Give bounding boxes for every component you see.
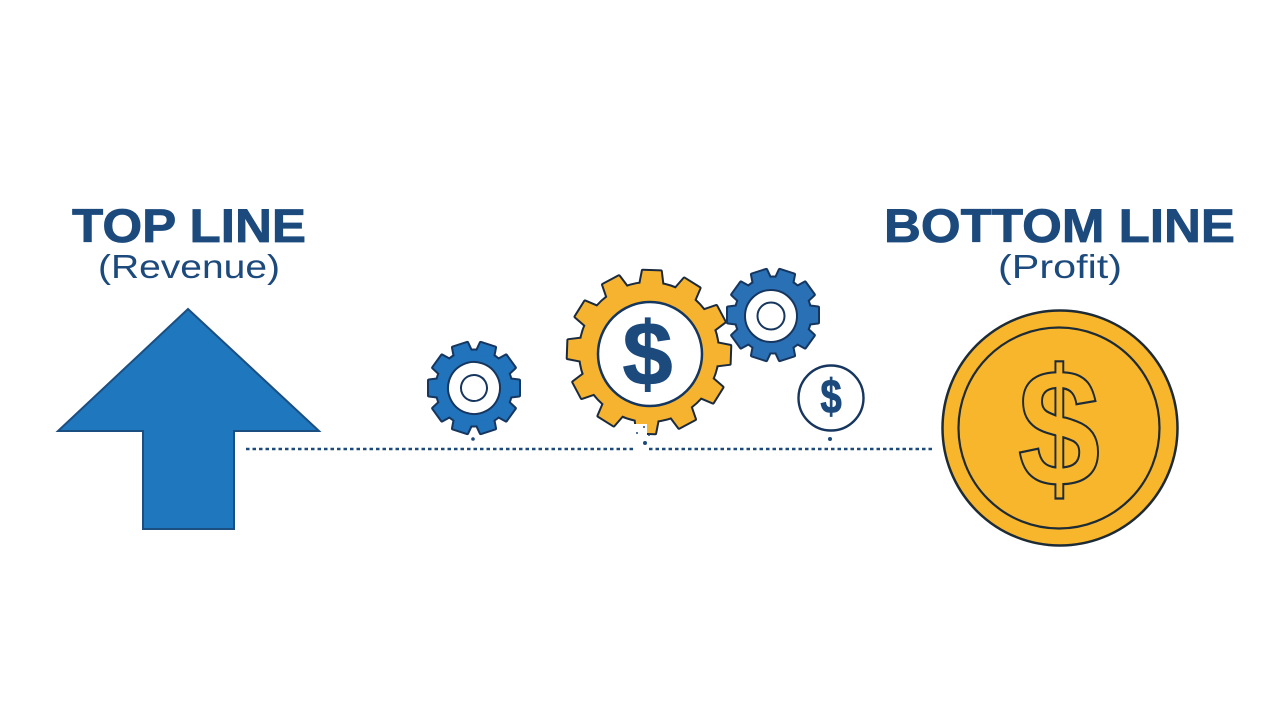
icon: left blue gear xyxy=(417,331,531,445)
icon: large gold coin with dollar: $ xyxy=(1018,334,1100,522)
heading: bottom line xyxy=(884,199,1235,285)
icon: right blue gear xyxy=(716,258,830,372)
heading: top line xyxy=(72,199,306,285)
icon: large gold gear with dollar: $ xyxy=(622,305,673,405)
icon: right gear hub xyxy=(745,290,797,342)
icon: small dollar coin: $ xyxy=(820,371,842,424)
icon: large gold coin with dollar xyxy=(942,310,1178,546)
heading: bottom line: BOTTOM LINE xyxy=(884,199,1235,252)
heading: top line: (Revenue) xyxy=(98,248,280,285)
icon: large gold gear with dollar xyxy=(565,268,733,436)
heading: top line: TOP LINE xyxy=(72,199,306,252)
heading: bottom line: (Profit) xyxy=(998,248,1122,285)
icon: small dollar coin xyxy=(798,366,864,430)
icon: revenue up arrow xyxy=(58,309,319,529)
dotted connector line xyxy=(246,424,935,451)
